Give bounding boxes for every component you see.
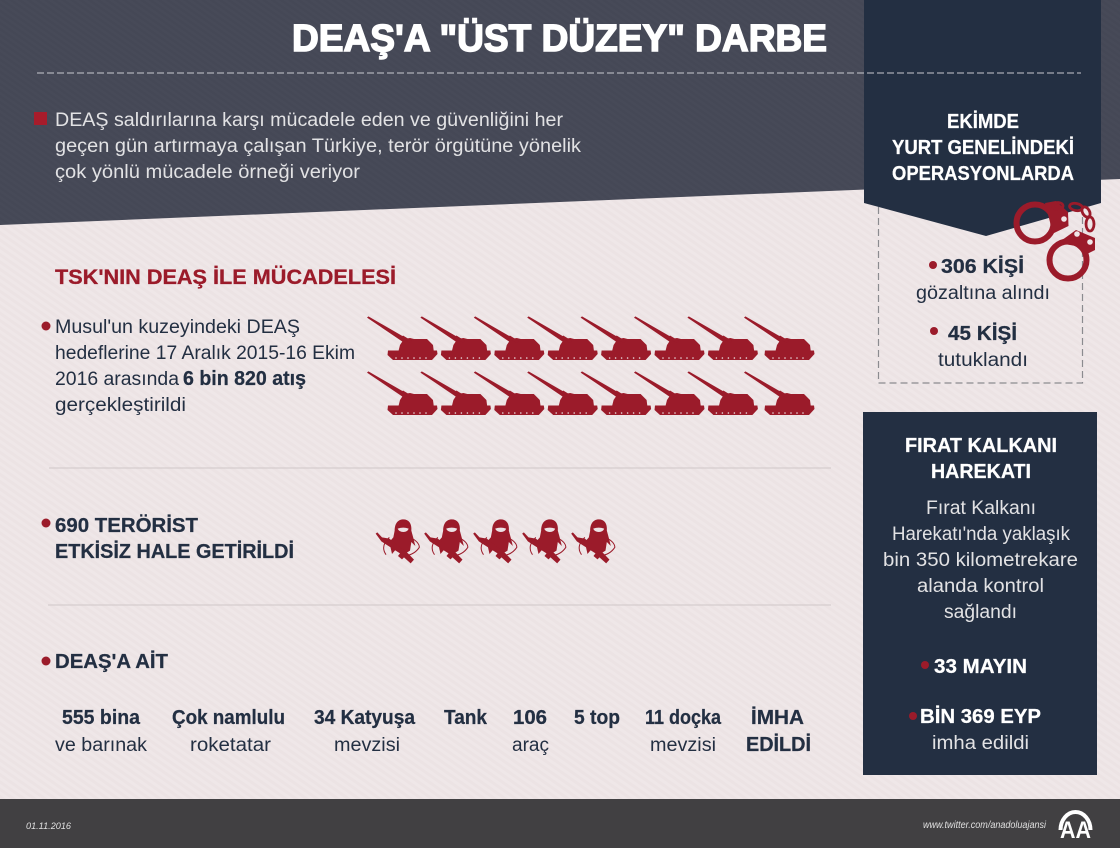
date: 01.11.2016 <box>26 821 72 832</box>
intro text: geçen gün artırmaya çalışan Türkiye, terör örgütüne yönelik <box>55 136 582 157</box>
list: destroyed assets: araç <box>512 735 549 756</box>
panel body text: alanda kontrol <box>917 576 1044 597</box>
panel: detentions dashed box <box>878 190 1082 383</box>
list: destroyed assets: mevzisi <box>334 735 400 756</box>
heading: TSK struggle: TSK'NIN DEAŞ İLE MÜCADELESİ <box>55 266 396 289</box>
306 detained: gözaltına alındı <box>916 283 1050 304</box>
footer <box>0 799 1120 848</box>
banner: operations <box>864 0 1101 236</box>
list: destroyed assets: ve barınak <box>55 735 148 756</box>
list: destroyed assets: mevzisi <box>650 735 716 756</box>
intro text <box>34 110 582 183</box>
306 detained: 306 KİŞİ <box>941 255 1024 278</box>
45 arrested: 45 KİŞİ <box>948 322 1017 345</box>
icons: howitzer rows <box>367 316 814 415</box>
twitter link: www.twitter.com/anadoluajansi <box>923 820 1047 831</box>
panel body text: Fırat Kalkanı <box>926 498 1036 519</box>
text block: artillery shots: hedeflerine 17 Aralık 2015-16 Ekim <box>55 343 355 364</box>
45 arrested <box>930 322 1028 371</box>
text block: terrorists neutralised: ETKİSİZ HALE GETİRİLDİ <box>55 540 294 563</box>
banner: operations: YURT GENELİNDEKİ <box>892 136 1074 159</box>
panel heading: HAREKATI <box>931 461 1031 483</box>
list: destroyed assets: İMHA <box>751 706 804 729</box>
panel body text: bin 350 kilometrekare <box>883 550 1078 571</box>
heading: ISIS assets: DEAŞ'A AİT <box>55 650 168 673</box>
title: DEAŞ'A "ÜST DÜZEY" DARBE <box>292 17 827 60</box>
panel heading: FIRAT KALKANI <box>905 435 1057 457</box>
icon: handcuffs <box>1016 201 1095 278</box>
list: destroyed assets: 106 <box>513 707 547 729</box>
panel body text <box>883 498 1078 623</box>
intro text: DEAŞ saldırılarına karşı mücadele eden ve güvenliğini her <box>55 110 564 131</box>
306 detained <box>916 255 1050 304</box>
mines: 33 MAYIN <box>934 656 1027 678</box>
text block: artillery shots: 2016 arasında <box>55 369 179 390</box>
45 arrested: tutuklandı <box>938 350 1028 371</box>
list: destroyed assets: 555 bina <box>62 707 141 729</box>
list: destroyed assets: 34 Katyuşa <box>314 707 416 729</box>
text block: artillery shots: Musul'un kuzeyindeki DEAŞ <box>55 317 300 338</box>
text block: terrorists neutralised <box>42 514 294 563</box>
explosives: BİN 369 EYP <box>920 705 1041 728</box>
icon: red square bullet <box>34 112 47 125</box>
list: destroyed assets <box>55 706 811 756</box>
list: destroyed assets: 11 doçka <box>645 707 722 729</box>
text block: artillery shots: gerçekleştirildi <box>55 395 186 416</box>
text block: terrorists neutralised: 690 TERÖRİST <box>55 514 198 537</box>
list: destroyed assets: Çok namlulu <box>172 707 285 729</box>
header band <box>0 0 1120 225</box>
text block: artillery shots: 6 bin 820 atış <box>183 368 306 390</box>
list: destroyed assets: Tank <box>444 707 488 729</box>
panel body text: sağlandı <box>944 602 1017 623</box>
logo: AA: AA <box>1060 817 1091 844</box>
panel heading <box>905 435 1057 483</box>
panel: Euphrates Shield <box>863 412 1097 775</box>
banner: operations: OPERASYONLARDA <box>892 163 1074 185</box>
list: destroyed assets: 5 top <box>574 707 620 729</box>
text block: artillery shots <box>42 317 355 416</box>
explosives <box>909 705 1041 754</box>
panel body text: Harekatı'nda yaklaşık <box>892 524 1070 545</box>
intro text: çok yönlü mücadele örneği veriyor <box>55 162 361 183</box>
list: destroyed assets: EDİLDİ <box>746 733 811 756</box>
icons: fighters <box>376 519 615 563</box>
explosives: imha edildi <box>932 733 1029 754</box>
banner: operations: EKİMDE <box>947 110 1019 133</box>
list: destroyed assets: roketatar <box>190 735 272 756</box>
